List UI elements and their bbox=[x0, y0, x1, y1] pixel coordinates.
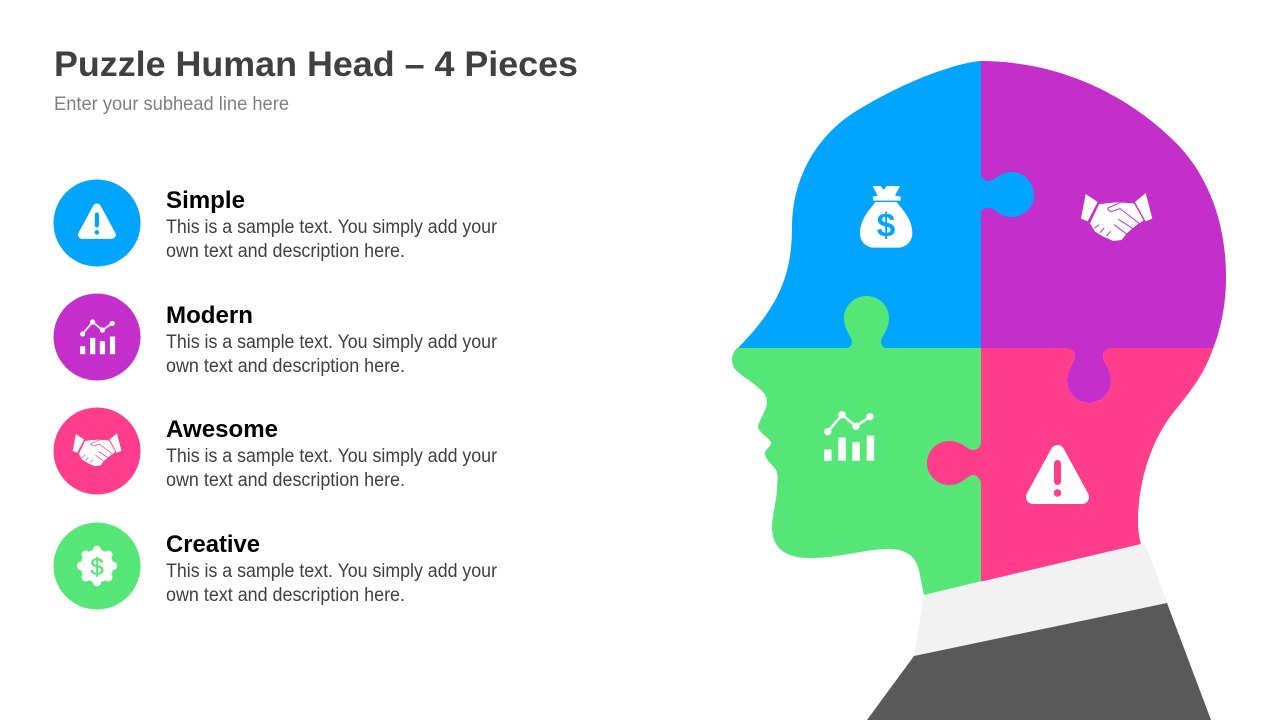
icon: line and bar chart bbox=[824, 411, 874, 461]
description: Simple: This is a sample text. You simply add your bbox=[166, 217, 498, 238]
heading: Modern: Modern bbox=[166, 302, 253, 329]
description: Modern: This is a sample text. You simply add your bbox=[166, 332, 498, 353]
icon: money bag: $ bbox=[877, 207, 896, 244]
icon: alert triangle bbox=[1033, 452, 1082, 497]
description: Awesome: own text and description here. bbox=[166, 470, 405, 491]
icon: handshake bbox=[1081, 193, 1152, 241]
collar bbox=[914, 543, 1168, 656]
description: Simple: own text and description here. bbox=[166, 241, 405, 262]
description: Creative bbox=[166, 561, 498, 606]
icon: money bag bbox=[860, 186, 912, 248]
puzzle piece: blue forehead bbox=[737, 61, 1034, 349]
description: Simple bbox=[166, 217, 498, 262]
subhead: Enter your subhead line here bbox=[54, 94, 289, 115]
puzzle piece: pink neck bbox=[927, 348, 1213, 582]
list item: Simple bbox=[54, 180, 498, 266]
description: Creative: own text and description here. bbox=[166, 585, 405, 606]
description: Creative: This is a sample text. You simply add your bbox=[166, 561, 498, 582]
icon: chart badge bbox=[54, 294, 140, 380]
puzzle piece: green face bbox=[732, 296, 982, 595]
title: Puzzle Human Head – 4 Pieces bbox=[54, 45, 578, 84]
description: Modern: own text and description here. bbox=[166, 356, 405, 377]
puzzle piece: purple crown bbox=[980, 61, 1226, 403]
heading: Creative: Creative bbox=[166, 531, 260, 558]
list item: Creative bbox=[54, 522, 498, 610]
heading: Awesome: Awesome bbox=[166, 416, 278, 443]
icon: gear dollar badge bbox=[54, 522, 140, 610]
list item: Modern bbox=[54, 294, 498, 380]
heading: Simple: Simple bbox=[166, 187, 245, 214]
description: Awesome: This is a sample text. You simply add your bbox=[166, 446, 498, 467]
icon: gear dollar badge: $ bbox=[90, 554, 104, 581]
description: Modern bbox=[166, 332, 498, 377]
icon: handshake badge bbox=[54, 408, 140, 494]
icon: alert badge bbox=[54, 180, 140, 266]
jacket bbox=[867, 603, 1211, 720]
list item: Awesome bbox=[54, 408, 498, 494]
description: Awesome bbox=[166, 446, 498, 491]
